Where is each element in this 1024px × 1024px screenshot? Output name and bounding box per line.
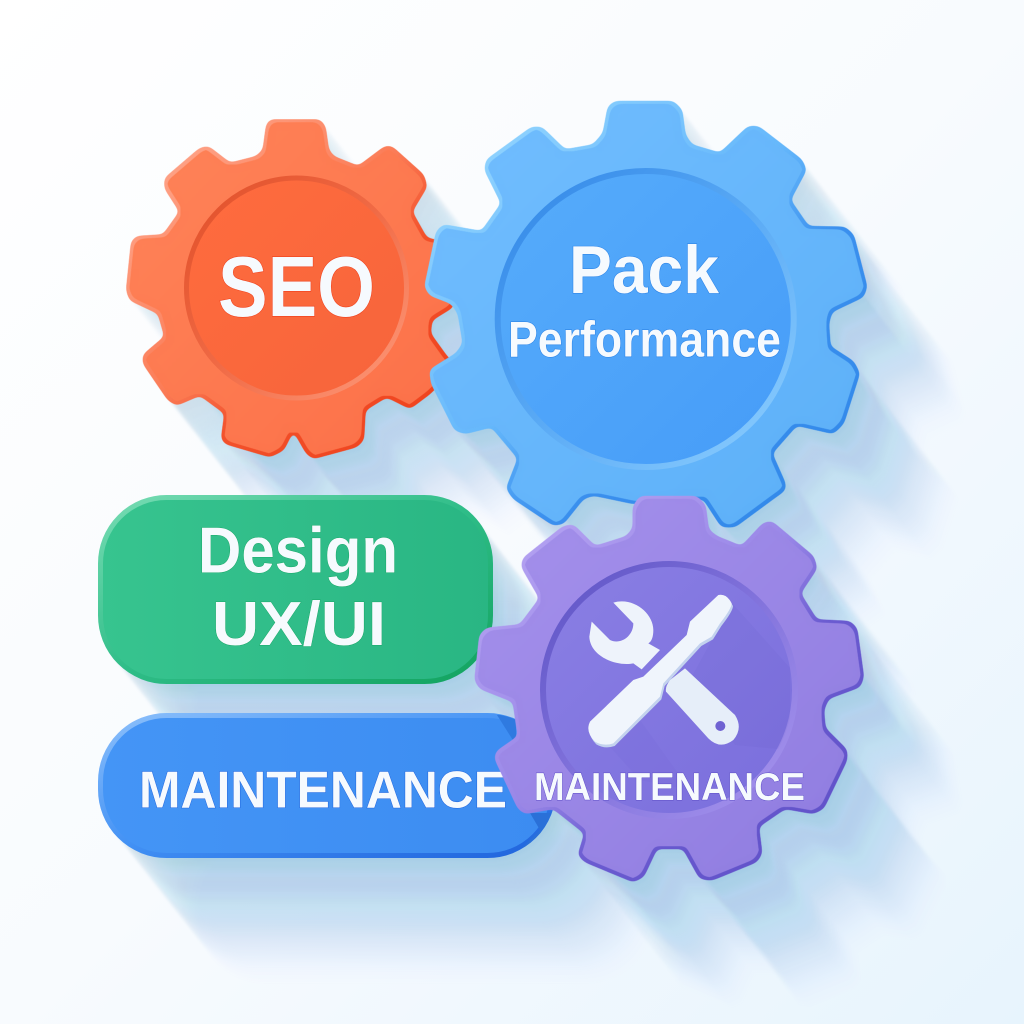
gear: maintenance tools <box>475 497 863 882</box>
pill: Design UX/UI <box>100 498 490 682</box>
label: Pack: Pack <box>569 232 719 308</box>
label: UX/UI: UX/UI <box>212 590 386 659</box>
label: SEO: SEO <box>218 240 375 335</box>
label: Design: Design <box>198 514 398 586</box>
label: MAINTENANCE: MAINTENANCE <box>139 762 507 820</box>
label: Performance: Performance <box>508 312 781 368</box>
pill: MAINTENANCE <box>100 715 556 857</box>
icon: wrench and screwdriver <box>588 595 739 747</box>
cast shadow on pill <box>497 715 551 838</box>
tool shadow <box>590 603 790 790</box>
gear: Pack Performance <box>425 102 867 527</box>
long diagonal shadows <box>102 106 965 1008</box>
gear: SEO <box>127 120 457 458</box>
label: MAINTENANCE: MAINTENANCE <box>534 766 805 809</box>
